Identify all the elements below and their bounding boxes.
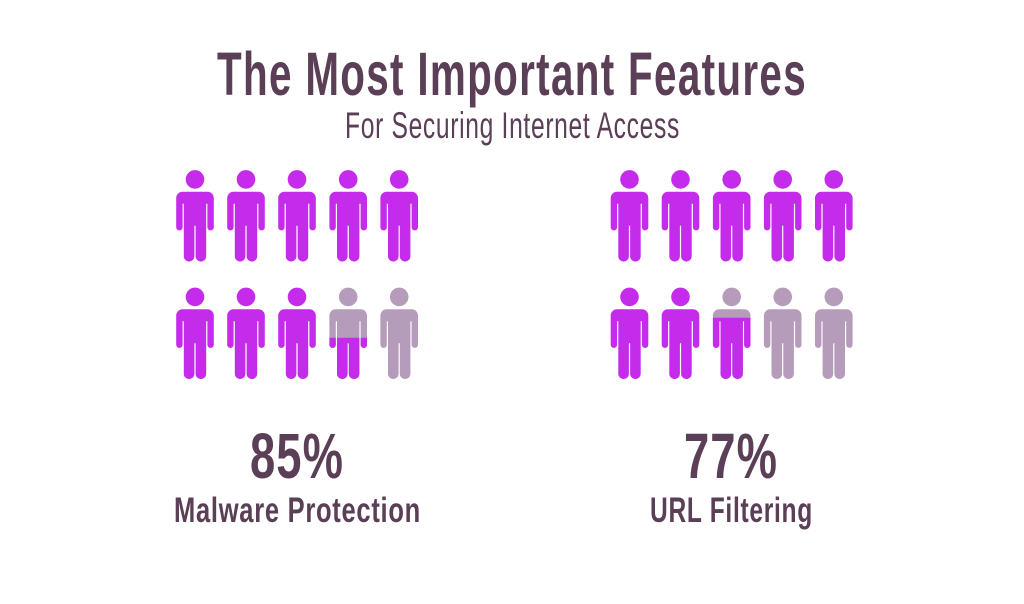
- person 1: [611, 170, 648, 262]
- person 3: [278, 170, 316, 262]
- person 8: partly filled: [713, 288, 750, 379]
- person 5: [380, 170, 418, 262]
- person 5: [815, 170, 853, 262]
- person 1: [176, 170, 214, 262]
- subtitle: For Securing Internet Access: [345, 105, 680, 146]
- label: malware protection: Malware Protection: [174, 491, 421, 530]
- person 7: [662, 288, 699, 379]
- stat: 85%: 85%: [250, 420, 344, 492]
- person 2: [227, 170, 265, 262]
- person 2: [662, 170, 699, 262]
- person 7: [227, 288, 265, 379]
- person 6: [176, 288, 214, 379]
- person 9: partly filled: [329, 288, 367, 379]
- person 10: unfilled: [380, 288, 418, 379]
- person 3: [713, 170, 750, 262]
- label: url filtering: URL Filtering: [650, 491, 813, 530]
- person 8: [278, 288, 316, 379]
- panel: url filtering pictogram: [611, 170, 853, 379]
- stat: 77%: 77%: [684, 420, 778, 492]
- person 4: [764, 170, 802, 262]
- person 10: unfilled: [815, 288, 853, 379]
- person 4: [329, 170, 367, 262]
- person 6: [611, 288, 648, 379]
- panel: malware protection pictogram: [176, 170, 418, 379]
- person 9: unfilled: [764, 288, 802, 379]
